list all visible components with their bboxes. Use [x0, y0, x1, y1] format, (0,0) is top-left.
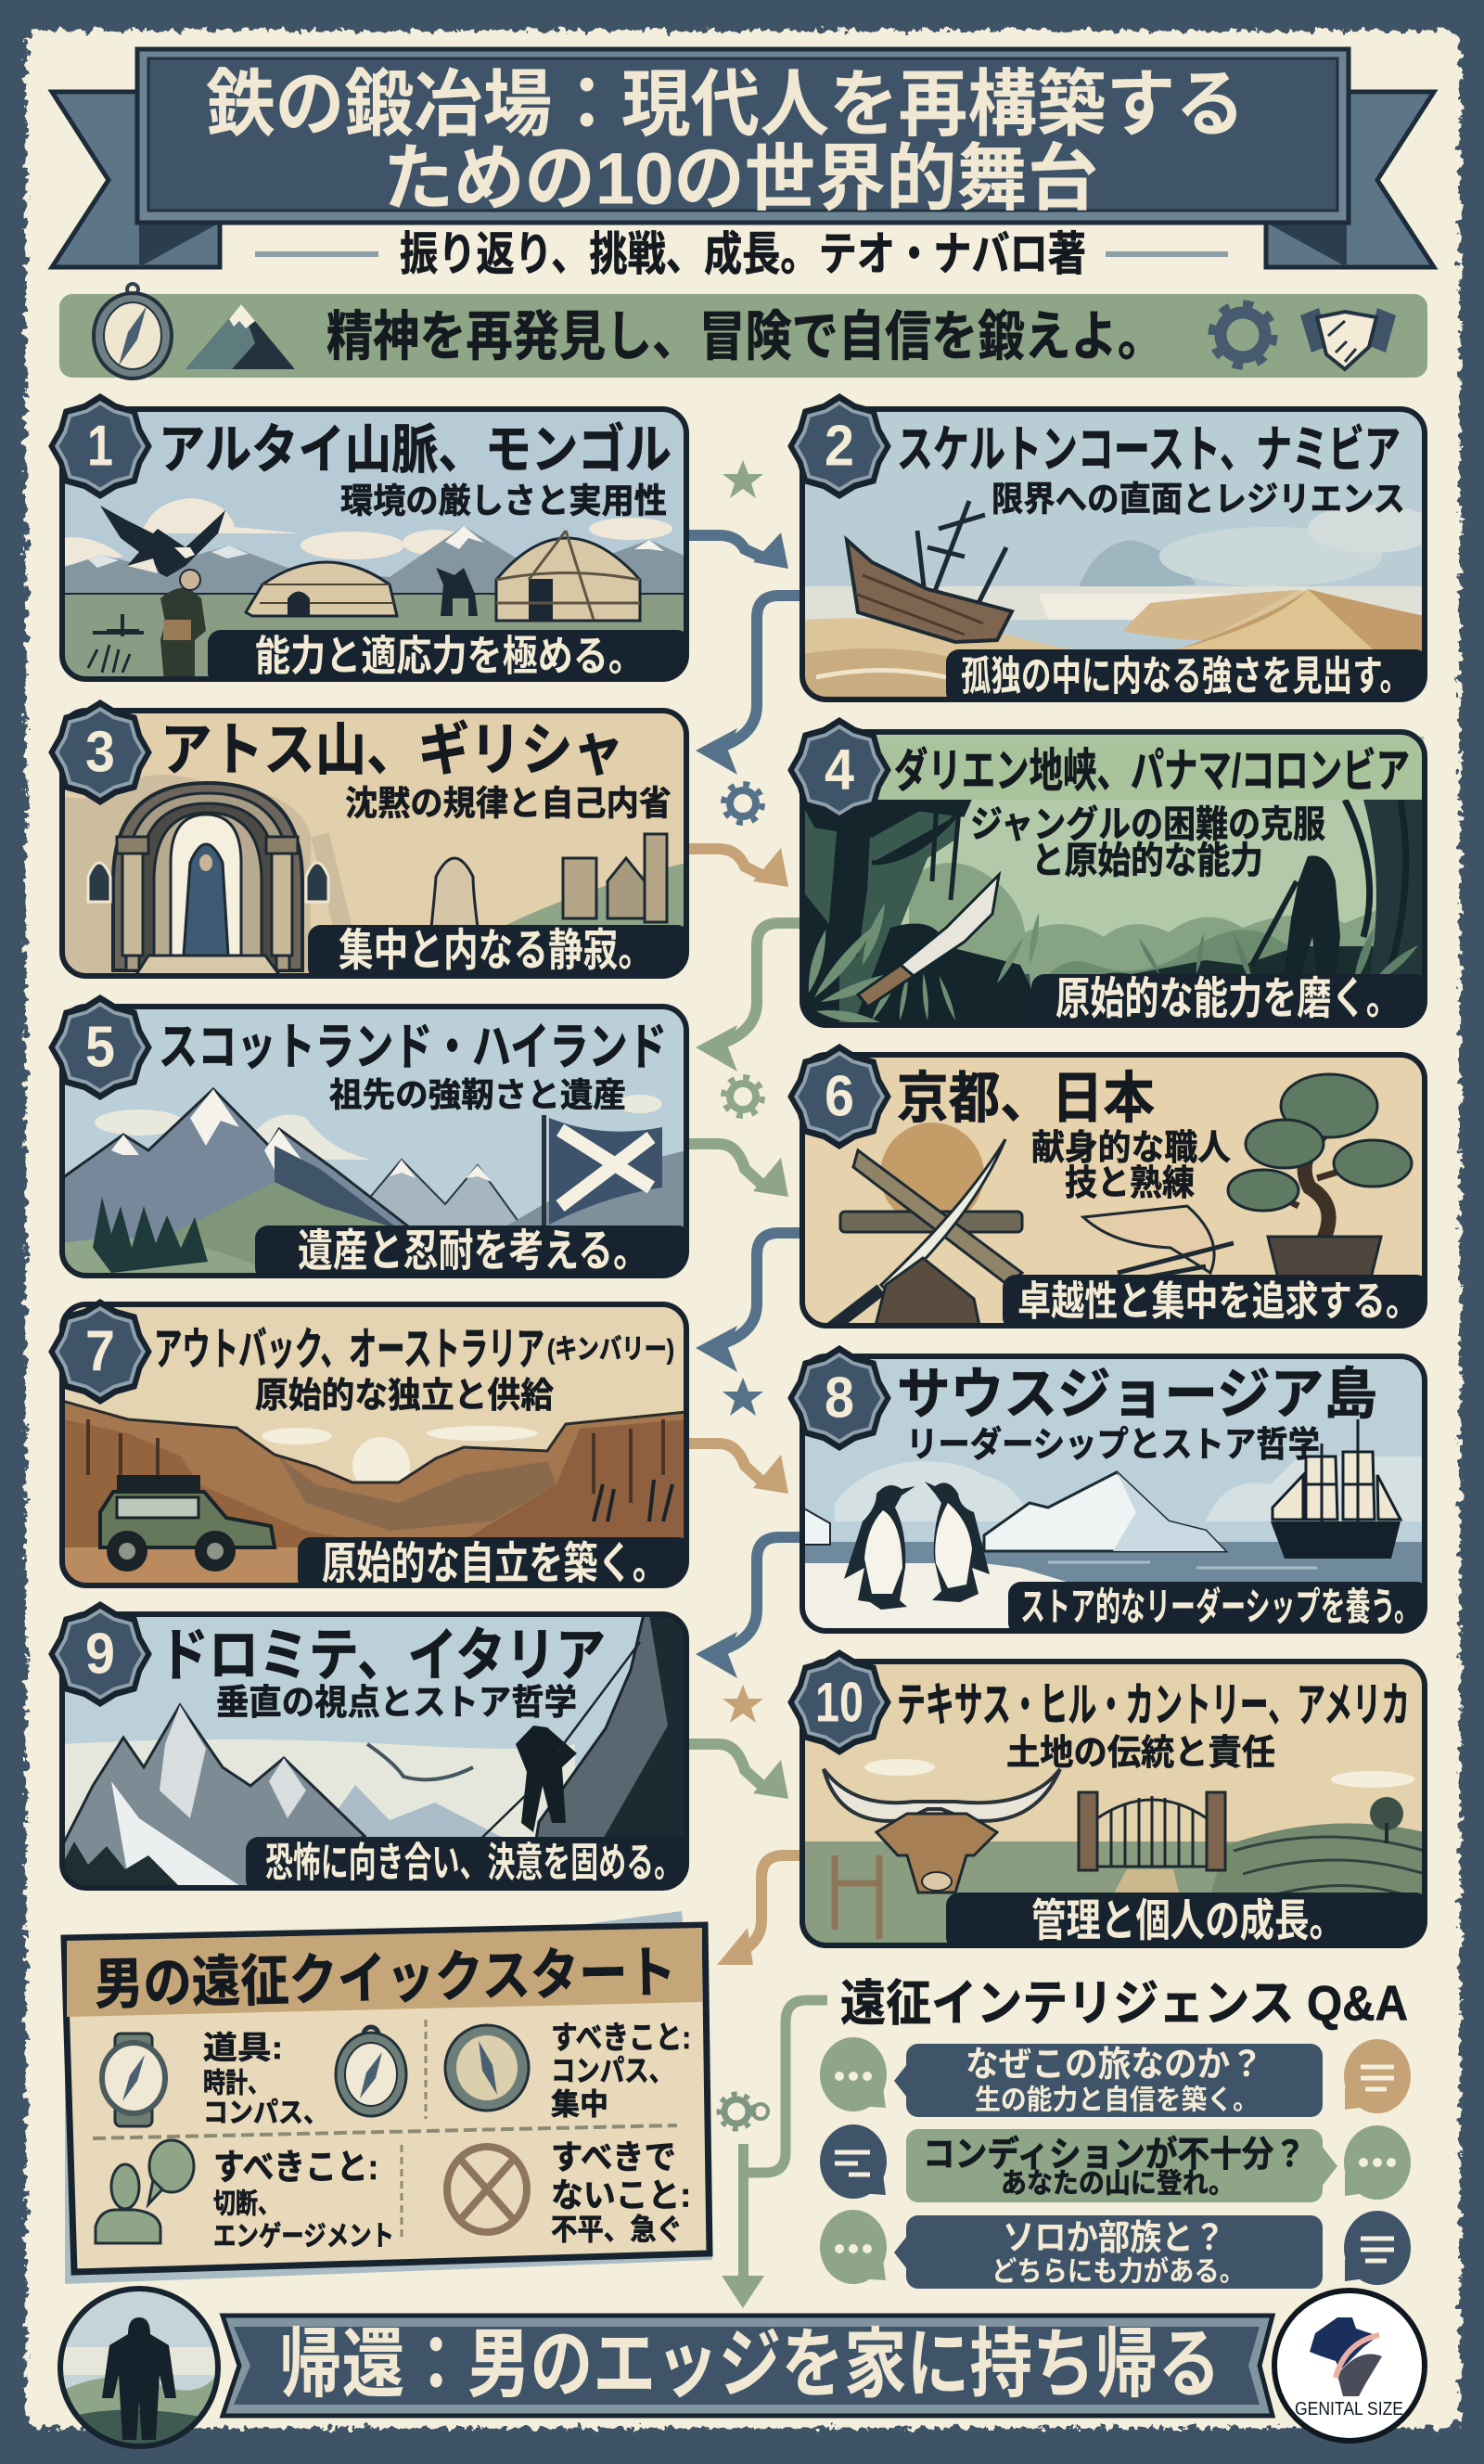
heading 7: (キンバリー) — [547, 1334, 674, 1366]
scene: canyon and 4x4 — [62, 1304, 686, 1592]
heading 6: 京都、日本 — [897, 1067, 1155, 1130]
subtitle: 振り返り、挑戦、成長。テオ・ナバロ著 — [400, 228, 1086, 280]
quick start do text: コンパス、 — [551, 2054, 673, 2087]
caption 10 — [946, 1893, 1428, 1950]
quick start tools text: コンパス、 — [203, 2098, 328, 2128]
badge 7: 7 — [85, 1319, 115, 1384]
badge 3 — [48, 699, 152, 805]
caption 9 — [246, 1837, 691, 1893]
icon: watch — [102, 2034, 165, 2126]
panel: card 3 Athos — [48, 699, 690, 981]
logo medallion — [1274, 2291, 1425, 2441]
badge 5: 5 — [85, 1015, 115, 1080]
badge 6 — [787, 1044, 891, 1149]
caption 10: 管理と個人の成長。 — [1031, 1896, 1344, 1946]
panel: Q&A 1: なぜこの旅なのか？ — [966, 2046, 1263, 2085]
caption 7: 原始的な自立を築く。 — [322, 1540, 667, 1588]
icon: mountain — [186, 304, 295, 369]
quick start header: 男の遠征クイックスタート — [94, 1942, 677, 2016]
icon: chat left 1 — [820, 2037, 887, 2111]
icon: handshake — [1300, 308, 1396, 369]
bottom banner — [223, 2316, 1273, 2416]
subheading 7: 原始的な独立と供給 — [255, 1377, 554, 1416]
icon: crossed circle — [447, 2147, 527, 2232]
quick start do not text: 不平、急ぐ — [551, 2213, 683, 2246]
badge 4: 4 — [825, 738, 854, 802]
title line 1: 鉄の鍛冶場：現代人を再構築する — [206, 63, 1245, 145]
icon: compass — [94, 284, 172, 379]
subheading 6: 献身的な職人 — [1031, 1129, 1231, 1168]
subheading 9: 垂直の視点とストア哲学 — [216, 1684, 577, 1723]
subheading 10: 土地の伝統と責任 — [1006, 1734, 1275, 1773]
badge 2 — [787, 393, 891, 499]
icon: silhouette medallion — [56, 2282, 223, 2449]
quick start engage text: 切断、 — [213, 2189, 280, 2219]
banner text: 帰還：男のエッジを家に持ち帰る — [279, 2323, 1221, 2406]
icon: person with speech — [96, 2140, 194, 2243]
icon: gears — [719, 2094, 768, 2129]
quick start tools text: 道具: — [203, 2031, 283, 2066]
arrow 6 to 7 — [696, 1233, 802, 1372]
panel: Q&A 2 — [906, 2129, 1337, 2202]
icon: star green — [723, 460, 763, 498]
subheading 4: と原始的な能力 — [1031, 841, 1263, 881]
scene: penguins, iceberg and ship — [802, 1356, 1425, 1635]
scene: jungle — [802, 732, 1425, 1027]
tagline band — [59, 284, 1427, 379]
quick start engage text: エンゲージメント — [213, 2221, 394, 2252]
panel: card 4 Darien — [787, 717, 1428, 1030]
panel: card 8 South Georgia — [787, 1345, 1429, 1636]
panel: card 7 Outback — [48, 1299, 691, 1592]
scene: climber and peaks — [62, 1614, 686, 1888]
caption 1: 能力と適応力を極める。 — [255, 633, 644, 679]
panel: Q&A 1: 生の能力と自信を築く。 — [975, 2085, 1259, 2115]
badge 1 — [48, 393, 152, 499]
caption 7 — [298, 1537, 684, 1583]
subheading 6: 技と熟練 — [1065, 1164, 1195, 1203]
quick start do not text: すべきで — [551, 2137, 676, 2176]
panel: Q&A 1 — [894, 2044, 1323, 2117]
icon: chat right 2 — [1344, 2125, 1411, 2200]
panel: card 1 Altai — [48, 393, 690, 686]
badge 2: 2 — [825, 414, 854, 479]
icon: star tan — [723, 1685, 763, 1723]
arrow 7 to 8 — [686, 1444, 788, 1494]
badge 7 — [48, 1299, 152, 1405]
panel: card 9 Dolomites — [48, 1601, 691, 1893]
panel: Q&A 2: あなたの山に登れ。 — [1001, 2169, 1235, 2199]
heading 1: アルタイ山脈、モンゴル — [159, 420, 672, 480]
arrow 4 to 5 — [696, 923, 802, 1072]
subheading 6 — [1031, 1129, 1231, 1203]
heading 5: スコットランド・ハイランド — [159, 1020, 667, 1075]
scene: katana and bonsai — [802, 1055, 1425, 1336]
badge 9: 9 — [85, 1622, 115, 1687]
quick start engage text: すべきこと: — [213, 2149, 378, 2188]
heading: Q&A: 遠征インテリジェンス Q&A — [840, 1976, 1408, 2032]
heading 7: アウトバック、オーストラリア — [154, 1325, 544, 1375]
panel: quick start — [64, 1911, 712, 2284]
logo text: GENITAL SIZE — [1295, 2399, 1403, 2419]
badge 9 — [48, 1601, 152, 1707]
ribbon tail left — [52, 92, 220, 267]
panel: card 10 Texas — [787, 1649, 1428, 1950]
subheading 2: 限界への直面とレジリエンス — [991, 481, 1405, 518]
caption 5: 遺産と忍耐を考える。 — [298, 1226, 648, 1277]
icon: chat left 2 — [820, 2124, 887, 2199]
badge 8: 8 — [825, 1366, 854, 1431]
scene: highlands with flag — [62, 1007, 686, 1276]
icon: pocket compass — [336, 2027, 406, 2116]
panel: Q&A 2: コンディションが不十分？ — [923, 2135, 1306, 2175]
badge 3: 3 — [85, 720, 115, 785]
badge 4 — [787, 717, 891, 823]
quick start do not text: ないこと: — [551, 2176, 691, 2214]
scene: steppe with yurts — [62, 409, 686, 684]
caption 3: 集中と内なる静寂。 — [339, 926, 653, 976]
badge 5 — [48, 995, 152, 1100]
subheading 5: 祖先の強靭さと遺産 — [329, 1076, 626, 1113]
badge 10 — [787, 1649, 891, 1755]
connector: Q&A to return — [719, 2000, 827, 2308]
connector arrows — [686, 533, 802, 1965]
arrow 3 to 4 — [686, 848, 788, 887]
icon: chat left 3 — [820, 2210, 887, 2284]
quick start engage text — [213, 2149, 394, 2252]
arrow 10 to quick start — [717, 1855, 802, 1965]
icon: chat right 3 — [1344, 2211, 1411, 2285]
quick start do text — [551, 2021, 691, 2121]
icon: gear blue — [723, 784, 762, 823]
quick start tools text: 時計、 — [203, 2069, 270, 2098]
quick start do text: すべきこと: — [551, 2021, 691, 2056]
heading 8: サウスジョージア島 — [897, 1364, 1377, 1425]
caption 9: 恐怖に向き合い、決意を固める。 — [265, 1841, 682, 1885]
scene: shipwreck and dunes — [802, 409, 1438, 706]
tagline text: 精神を再発見し、冒険で自信を鍛えよ。 — [326, 306, 1164, 367]
subheading 4 — [970, 804, 1325, 881]
badge 1: 1 — [87, 414, 113, 479]
ribbon tail right — [1266, 92, 1434, 267]
quick start do not text — [551, 2137, 691, 2246]
arrow 8 to 9 — [696, 1537, 802, 1678]
subheading 1: 環境の厳しさと実用性 — [340, 482, 667, 520]
icon: gear — [1212, 304, 1273, 366]
arrow 5 to 6 — [686, 1144, 788, 1197]
panel: card 6 Kyoto — [787, 1044, 1429, 1336]
icon: compass — [445, 2025, 529, 2111]
icon: gear green — [723, 1077, 762, 1116]
arrow 1 to 2 — [686, 533, 788, 569]
subheading 4: ジャングルの困難の克服 — [970, 804, 1325, 845]
icon: star slate — [723, 1378, 763, 1416]
title line 2: ための10の世界的舞台 — [383, 137, 1098, 219]
subheading 8: リーダーシップとストア哲学 — [906, 1426, 1320, 1465]
heading 9: ドロミテ、イタリア — [159, 1623, 606, 1688]
panel: card 5 Scotland — [48, 995, 691, 1281]
quick start do text: 集中 — [551, 2087, 608, 2121]
badge 10: 10 — [815, 1672, 864, 1733]
heading 3: アトス山、ギリシャ — [160, 718, 624, 783]
badge 8 — [787, 1345, 891, 1451]
connector symbols — [723, 460, 763, 1723]
quick start tools text — [203, 2031, 328, 2128]
icon: chat right 1 — [1344, 2039, 1411, 2113]
scene: monastery arch — [62, 711, 686, 976]
arrow 9 to 10 — [686, 1744, 788, 1799]
badge 6: 6 — [825, 1065, 854, 1128]
subheading 3: 沈黙の規律と自己内省 — [345, 785, 672, 822]
panel: card 2 Skeleton Coast — [787, 393, 1438, 706]
panel: Q&A 3 — [894, 2215, 1323, 2289]
title banner — [52, 49, 1434, 267]
scene: longhorn and gate — [802, 1662, 1425, 1948]
panel: Q&A 3: どちらにも力がある。 — [991, 2256, 1245, 2288]
arrow 2 to 3 — [696, 596, 802, 775]
panel: Q&A 3: ソロか部族と？ — [1003, 2219, 1225, 2258]
